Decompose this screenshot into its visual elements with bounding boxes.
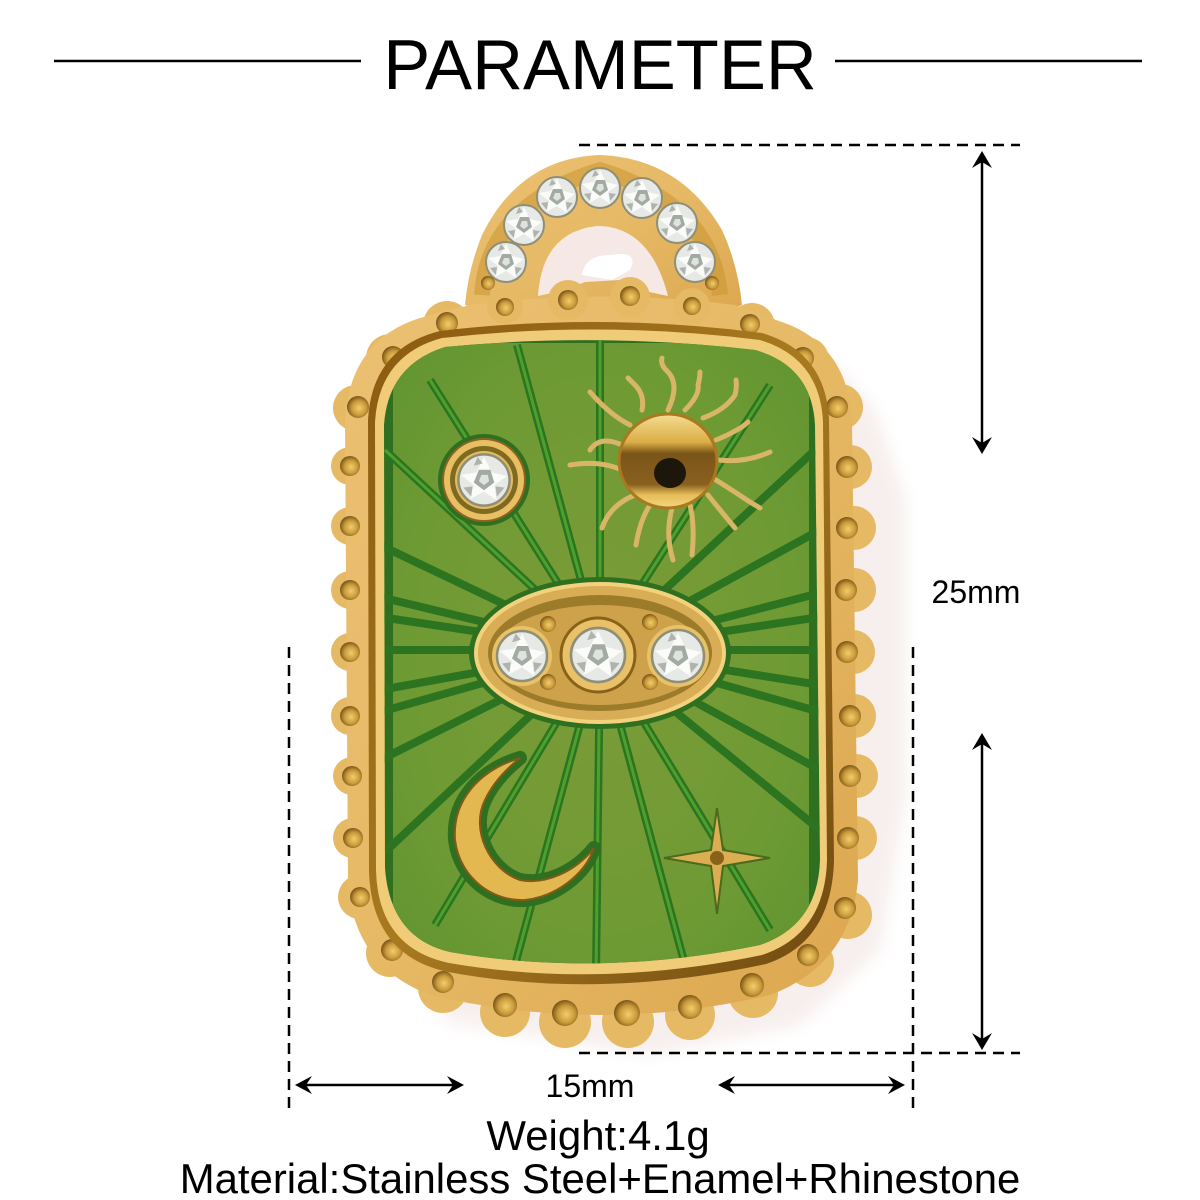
width label: 15mm	[546, 1068, 634, 1104]
sun	[570, 358, 770, 560]
pendant shadow	[440, 360, 905, 1055]
weight text: Weight:4.1g	[486, 1112, 710, 1159]
small round rhinestone	[443, 439, 525, 521]
pendant	[331, 155, 878, 1048]
beaded frame	[331, 276, 878, 1048]
bail	[465, 155, 742, 325]
oval eye with three rhinestones	[476, 584, 724, 722]
crescent moon	[455, 758, 594, 900]
height label: 25mm	[932, 574, 1020, 610]
green enamel panel with rays	[380, 330, 820, 975]
title rule left	[54, 60, 361, 62]
pendant and dimension drawing	[54, 60, 1142, 1108]
title: PARAMETER	[383, 25, 817, 104]
dimension: width	[289, 647, 913, 1112]
title rule right	[835, 60, 1142, 62]
four point star	[664, 808, 770, 914]
dimension: height	[579, 145, 1020, 1053]
